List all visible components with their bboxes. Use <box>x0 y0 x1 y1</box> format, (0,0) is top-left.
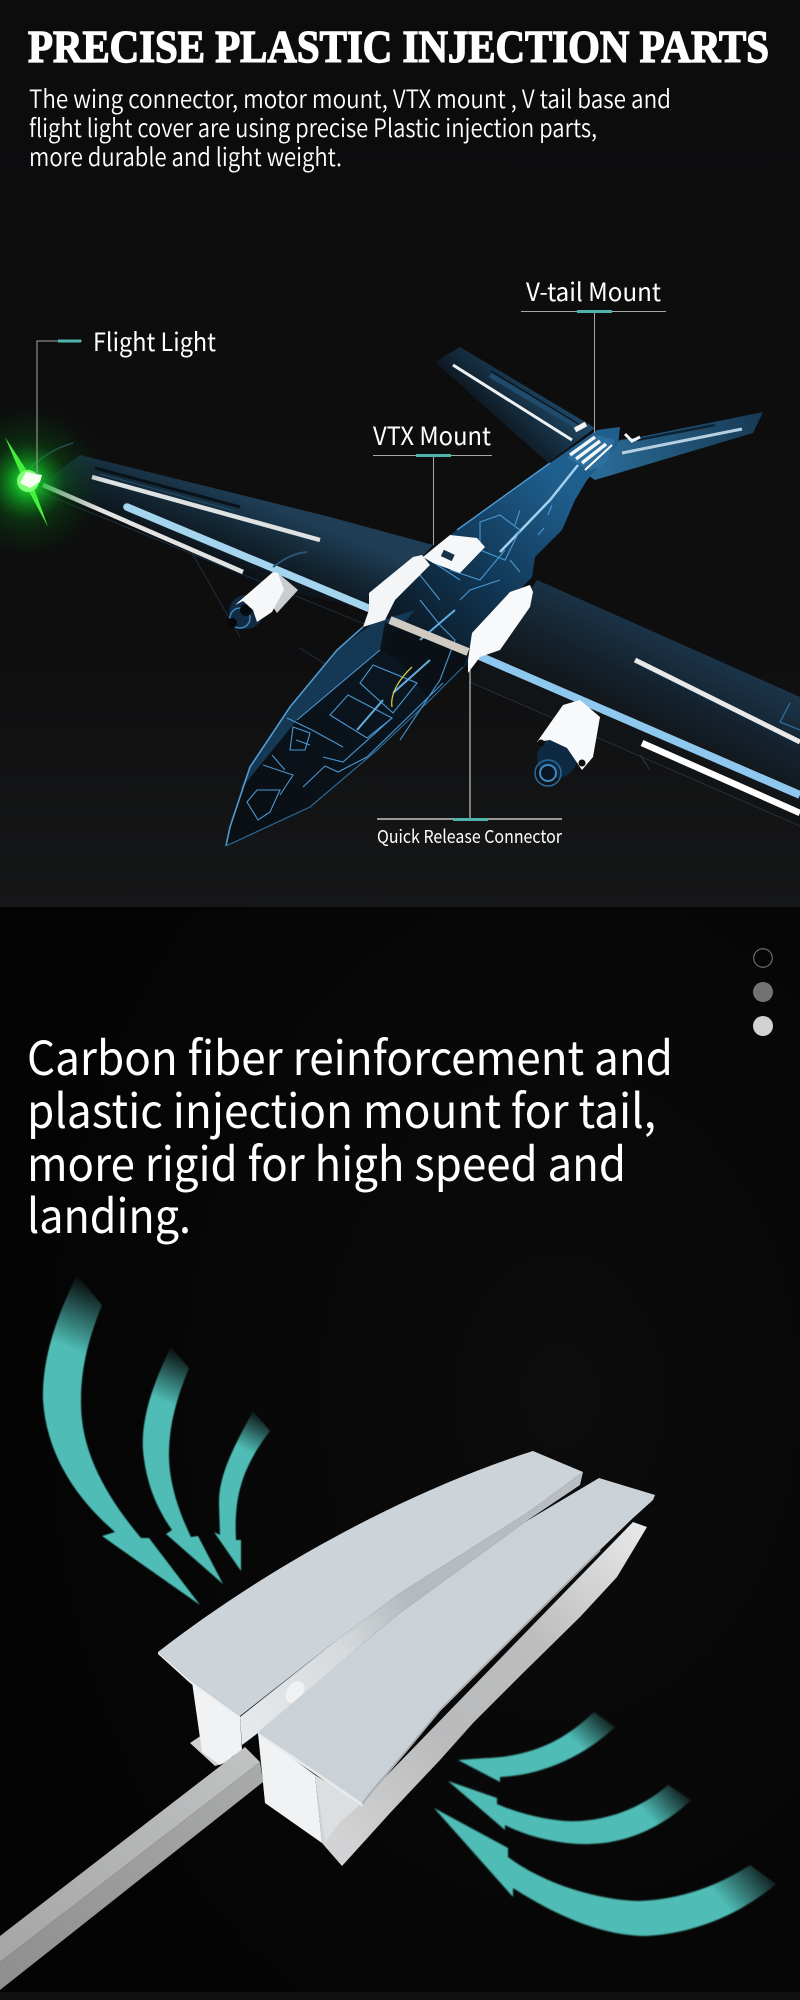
callout: Quick Release Connector: Quick Release Connector <box>377 823 563 849</box>
intro paragraph: flight light cover are using precise Plastic injection parts, <box>29 109 597 145</box>
pagination dots <box>753 949 773 1036</box>
left V-tail <box>435 347 595 463</box>
arrow 5 <box>448 1781 691 1844</box>
top plate left <box>158 1451 583 1716</box>
right wing <box>470 580 800 827</box>
VTX mount part <box>423 535 485 573</box>
intro paragraph: more durable and light weight. <box>29 138 342 174</box>
section heading: more rigid for high speed and <box>27 1126 626 1195</box>
background: lower section <box>0 907 800 1992</box>
intro paragraph <box>29 80 671 174</box>
arrows below tail mount <box>434 1712 776 1936</box>
callout: VTX Mount: VTX Mount <box>373 417 492 453</box>
callout: Quick Release Connector <box>377 667 563 849</box>
top plate right <box>258 1478 655 1804</box>
left motor <box>227 552 307 629</box>
flight light <box>0 404 106 560</box>
underside surface <box>315 1522 647 1866</box>
carbon spar <box>127 507 800 795</box>
arrow 6 <box>434 1808 776 1936</box>
callout: Flight Light: Flight Light <box>93 323 217 359</box>
right V-tail <box>580 412 763 480</box>
callout: Flight Light <box>37 323 217 475</box>
intro paragraph: The wing connector, motor mount, VTX mount , V tail base and <box>29 80 671 116</box>
quick release connector right <box>468 585 533 673</box>
arrows above tail mount <box>43 1275 270 1605</box>
slot <box>240 1472 583 1745</box>
section heading: plastic injection mount for tail, <box>27 1073 656 1142</box>
arrow 4 <box>458 1712 615 1782</box>
arrow 1 <box>43 1275 200 1605</box>
callout: VTX Mount <box>373 417 492 545</box>
bottom strip <box>0 1992 800 2000</box>
section heading: Carbon fiber reinforcement and <box>27 1020 673 1089</box>
section heading: landing. <box>27 1178 191 1247</box>
aircraft x-ray illustration <box>0 347 800 846</box>
tail mount 3D part <box>0 1451 655 1990</box>
right motor <box>535 700 600 786</box>
slot hole <box>282 1678 308 1706</box>
background: upper section <box>0 0 800 907</box>
web right face <box>258 1733 322 1843</box>
fuselage <box>226 427 620 846</box>
quick release connector left <box>363 555 430 627</box>
arrow 2 <box>143 1347 223 1584</box>
callout: V-tail Mount <box>521 273 666 433</box>
fuselage wiring <box>247 505 552 820</box>
bracket <box>190 1735 235 1766</box>
section heading <box>27 1020 673 1247</box>
callout: V-tail Mount: V-tail Mount <box>526 273 662 309</box>
left wing <box>28 443 433 680</box>
hollow interior wall <box>315 1775 362 1842</box>
arrow 3 <box>214 1411 270 1571</box>
web left face <box>192 1682 242 1765</box>
carbon bar <box>0 1747 263 1990</box>
